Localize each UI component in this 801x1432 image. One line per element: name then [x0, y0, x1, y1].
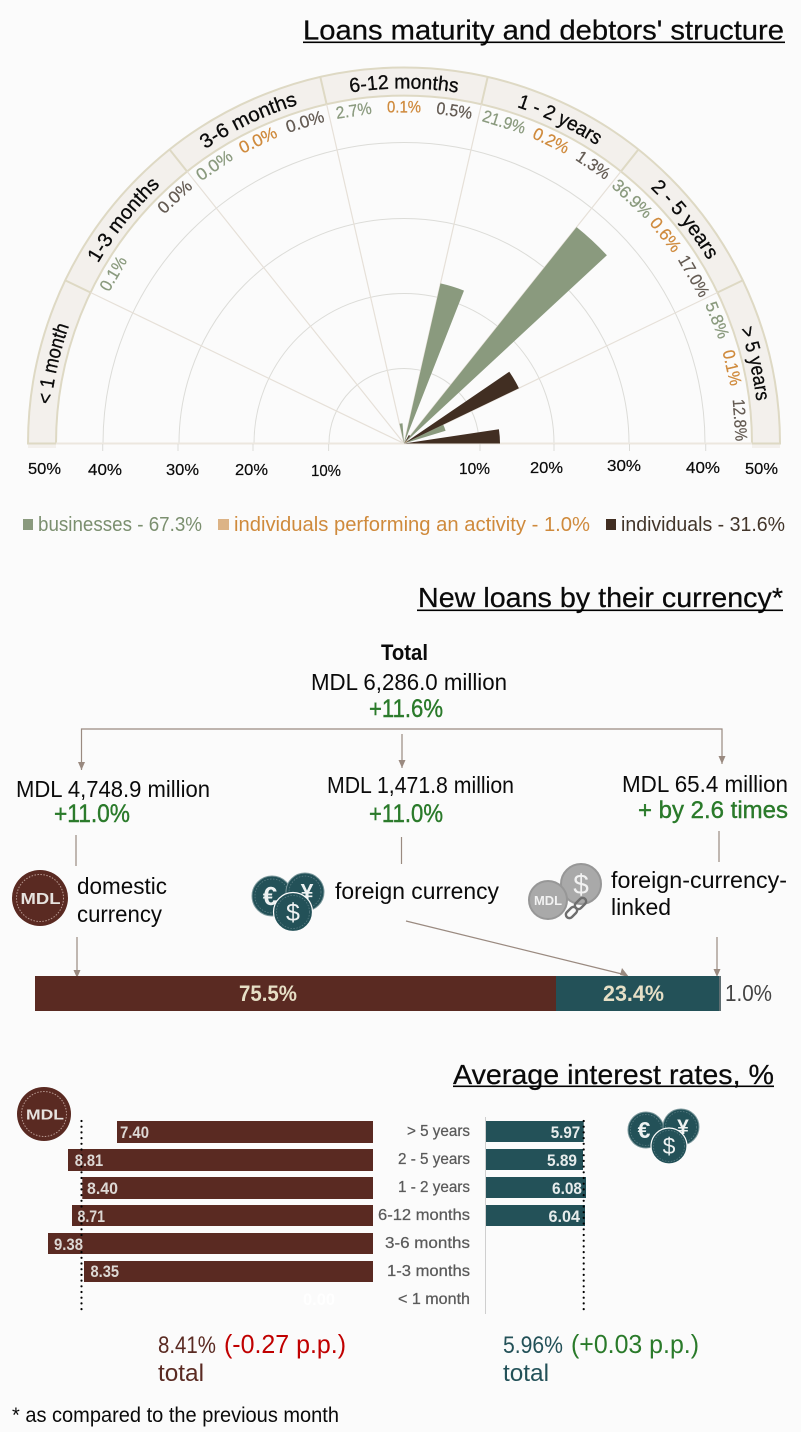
label: foreign-currency-linked: linked	[611, 894, 671, 920]
label: foreign currency: foreign currency	[335, 878, 499, 904]
icon: MDL coin small: MDL	[26, 1106, 64, 1124]
wedge: businesses, over 5 years	[404, 425, 446, 444]
bar chart: MDL interest rates: 8.40	[87, 1179, 118, 1198]
bar chart: MDL interest rates: 0.00	[303, 1290, 335, 1309]
label: foreign-currency-linked	[611, 867, 787, 920]
axis labels: 20%	[235, 462, 268, 479]
figures: foreign currency	[327, 772, 514, 828]
connector stubs to category icons	[76, 831, 719, 866]
stacked bar: currency shares: 1.0%	[725, 980, 772, 1006]
labels: percentages per debtor group: 2.7%	[334, 99, 373, 123]
axis labels: 10%	[311, 463, 341, 480]
axis labels: 40%	[88, 462, 122, 479]
total new loans: MDL 6,286.0 million	[311, 669, 507, 695]
labels: percentages per debtor group: 5.8%	[701, 299, 733, 341]
bar chart: foreign currency interest rates: 6.08	[552, 1179, 582, 1198]
stacked bar: currency shares: 75.5%	[239, 981, 297, 1006]
title: average interest rates: Average interest rates, %	[453, 1059, 774, 1090]
icon: foreign-currency-linked coins	[529, 864, 601, 920]
axis labels: 10%	[459, 461, 490, 478]
title: loans maturity: Loans maturity and debtors' structure	[303, 14, 784, 46]
icon: foreign currency coins: €	[263, 881, 277, 911]
labels: percentages per debtor group: 0.1%	[96, 253, 131, 294]
icon: foreign currency coins	[252, 873, 324, 932]
labels: percentages per debtor group	[96, 98, 751, 442]
category labels: maturity: 1 - 2 years	[398, 1179, 470, 1196]
axis labels: 50%	[745, 461, 778, 478]
label: domestic currency: currency	[77, 901, 162, 927]
labels: percentages per debtor group: 0.0%	[192, 146, 236, 185]
total rate: foreign currency	[503, 1329, 699, 1387]
wedge: businesses, 6-12 months	[400, 423, 404, 444]
labels: percentages per debtor group: 1.3%	[573, 147, 614, 183]
icon: MDL coin: MDL	[20, 891, 61, 908]
axis labels: 40%	[686, 460, 720, 477]
axis labels	[28, 458, 778, 480]
axis labels: 20%	[530, 460, 563, 477]
category labels: maturity: < 1 month	[398, 1291, 470, 1308]
stacked bar: currency shares	[35, 976, 772, 1011]
icon: foreign-currency-linked coins: $	[573, 869, 589, 900]
labels: percentages per debtor group: 0.1%	[719, 348, 745, 387]
figures: foreign currency: +11.0%	[369, 800, 443, 828]
total rate: MDL: total	[158, 1360, 204, 1387]
bar chart: MDL interest rates: 9.38	[54, 1235, 83, 1254]
icon: foreign currency coins small: ¥	[677, 1116, 689, 1139]
label: domestic currency: domestic	[77, 873, 167, 899]
outer band with maturity labels: 3-6 months	[200, 96, 297, 148]
connector arrows from total	[78, 729, 726, 770]
category labels: maturity: 3-6 months	[385, 1235, 470, 1252]
arrows into share bar	[74, 921, 720, 978]
outer band with maturity labels: 2 - 5 years	[650, 180, 716, 259]
labels: percentages per debtor group: 36.9%	[608, 176, 656, 222]
total rate: MDL	[158, 1329, 346, 1387]
legend: individuals - 31.6%	[621, 514, 785, 536]
total new loans: +11.6%	[369, 695, 443, 723]
bar chart: MDL interest rates: 7.40	[120, 1123, 149, 1142]
category labels: maturity: 1-3 months	[387, 1263, 470, 1280]
total rate: foreign currency: total	[503, 1360, 549, 1387]
labels: percentages per debtor group: 0.5%	[435, 99, 474, 123]
icon: foreign currency coins: ¥	[301, 879, 314, 905]
total new loans	[311, 640, 507, 723]
outer band with maturity labels: 1 - 2 years	[518, 95, 601, 144]
outer band with maturity labels	[27, 66, 781, 448]
labels: percentages per debtor group: 0.2%	[530, 124, 572, 158]
bar chart: MDL interest rates: 8.35	[90, 1262, 119, 1281]
stacked bar: currency shares: 23.4%	[603, 981, 664, 1006]
bar chart: MDL interest rates: 8.81	[75, 1151, 103, 1170]
figures: domestic currency: MDL 4,748.9 million	[16, 776, 210, 802]
outer band with maturity labels: > 5 years	[742, 326, 767, 400]
category labels: maturity: 6-12 months	[378, 1207, 470, 1224]
wedge: businesses, 2-5 years	[404, 227, 607, 444]
title: new loans by currency: New loans by their currency*	[418, 582, 783, 613]
labels: percentages per debtor group: 0.6%	[646, 214, 685, 256]
figures: foreign currency: MDL 1,471.8 million	[327, 772, 514, 798]
figures: foreign-currency-linked: MDL 65.4 million	[622, 771, 788, 797]
wedge: individuals, 1-2 years	[404, 435, 410, 444]
outer band with maturity labels: 6-12 months	[350, 75, 458, 92]
labels: percentages per debtor group: 12.8%	[729, 398, 751, 442]
icon: foreign-currency-linked coins: MDL	[534, 893, 562, 908]
bar chart: foreign currency interest rates: 6.04	[548, 1207, 581, 1226]
labels: percentages per debtor group: 0.0%	[154, 176, 196, 218]
total rate: foreign currency: 5.96%	[503, 1332, 563, 1359]
icon: foreign currency coins small: $	[663, 1133, 676, 1159]
total rate: MDL: 8.41%	[158, 1332, 216, 1359]
outer band with maturity labels: < 1 month	[40, 324, 69, 404]
wedge: businesses, 1-2 years	[404, 283, 464, 444]
outer band with maturity labels: 1-3 months	[88, 179, 159, 262]
total rate: MDL: (-0.27 p.p.)	[224, 1329, 346, 1359]
legend: individuals performing an activity - 1.0%	[234, 514, 590, 536]
axis labels: 30%	[166, 462, 199, 479]
label: domestic currency	[77, 873, 167, 927]
icon: MDL coin small	[17, 1087, 71, 1141]
chart: polar rose of loan maturity	[27, 66, 781, 480]
category labels: maturity	[378, 1123, 470, 1308]
bar chart: MDL interest rates	[48, 1121, 373, 1314]
category labels: maturity: > 5 years	[407, 1123, 470, 1140]
icon: foreign currency coins: $	[286, 899, 300, 927]
labels: percentages per debtor group: 0.1%	[387, 98, 421, 116]
bar chart: MDL interest rates: 8.71	[78, 1207, 105, 1226]
category labels: maturity: 2 - 5 years	[398, 1151, 470, 1168]
bar chart: foreign currency interest rates: 5.89	[547, 1151, 577, 1170]
bar chart: foreign currency interest rates	[486, 1117, 586, 1314]
wedge: activity, 2-5 years	[404, 440, 408, 444]
legend	[23, 514, 785, 536]
footnote: * as compared to the previous month	[12, 1404, 339, 1427]
figures: foreign-currency-linked: + by 2.6 times	[638, 797, 788, 824]
axis labels: 50%	[28, 461, 61, 478]
figures: foreign-currency-linked	[622, 771, 788, 824]
wedge: individuals, 2-5 years	[404, 372, 519, 444]
icon: MDL coin	[12, 870, 68, 926]
label: foreign-currency-linked: foreign-currency-	[611, 867, 787, 893]
icon: foreign currency coins small: €	[638, 1117, 651, 1143]
icon: foreign currency coins small	[628, 1109, 699, 1164]
total rate: foreign currency: (+0.03 p.p.)	[571, 1329, 699, 1359]
labels: percentages per debtor group: 0.0%	[236, 123, 280, 158]
total new loans: Total	[381, 640, 428, 665]
legend: businesses - 67.3%	[38, 514, 202, 536]
labels: percentages per debtor group: 17.0%	[674, 252, 713, 300]
figures: domestic currency: +11.0%	[54, 800, 130, 828]
wedge: individuals, over 5 years	[404, 429, 500, 444]
figures: domestic currency	[16, 776, 210, 828]
axis labels: 30%	[607, 458, 641, 475]
bar chart: foreign currency interest rates: 5.97	[551, 1123, 580, 1142]
labels: percentages per debtor group: 21.9%	[480, 107, 528, 138]
labels: percentages per debtor group: 0.0%	[284, 107, 326, 137]
